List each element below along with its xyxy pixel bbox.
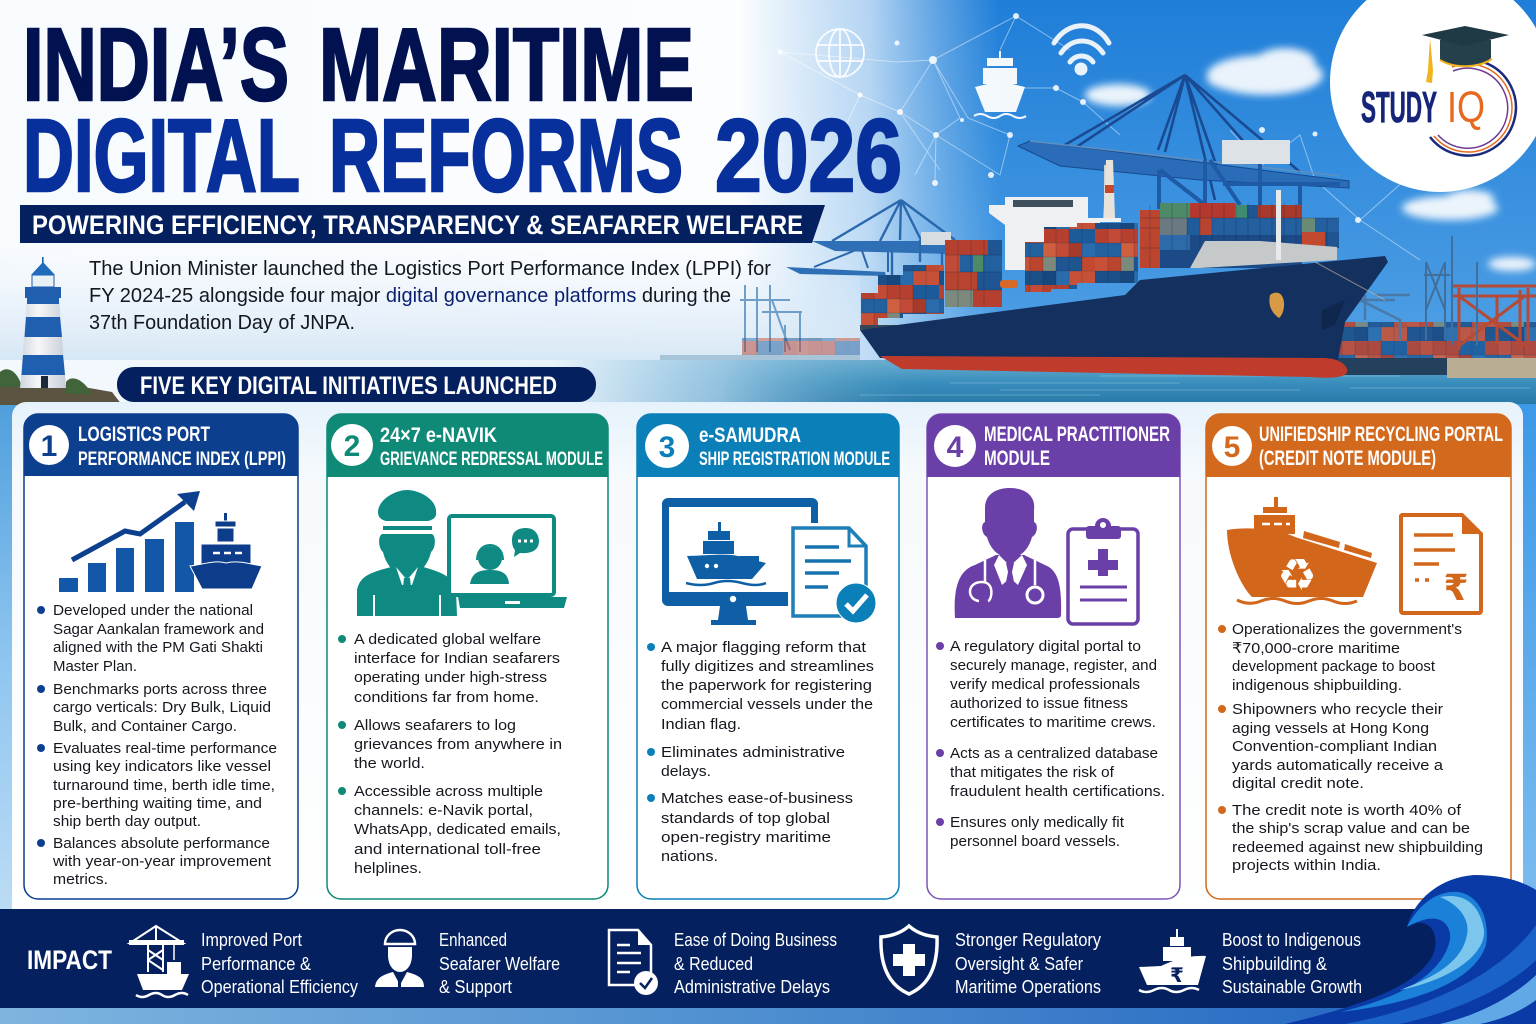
panel: card 1 LPPI: [24, 414, 298, 899]
card 2 text: A dedicated global welfare: [354, 631, 541, 648]
icon: recycling ship and credit note: ♻: [1277, 550, 1317, 601]
card 3 text: [661, 639, 874, 865]
card 1 text: metrics.: [53, 871, 108, 888]
card 3 text: Indian flag.: [661, 716, 741, 733]
card 3 bullets: [647, 643, 655, 802]
card 1 header: LOGISTICS PORT: [78, 423, 210, 446]
card 2 text: [354, 631, 562, 877]
card 3 header: SHIP REGISTRATION MODULE: [699, 449, 890, 470]
card 5 text: Shipowners who recycle their: [1232, 701, 1443, 718]
hatch covers and deck: [1000, 190, 1337, 288]
card 4 bullets: [936, 642, 944, 826]
card 2 bullets: [338, 635, 346, 795]
section pill: five key initiatives: FIVE KEY DIGITAL INITIATIVES LAUNCHED: [140, 372, 557, 400]
card 5 header: 5: [1224, 431, 1240, 464]
panel: card 3 e-Samudra: [637, 414, 899, 899]
card 2 text: grievances from anywhere in: [354, 736, 562, 753]
card 5 text: Operationalizes the government's: [1232, 621, 1462, 638]
subtitle band: POWERING EFFICIENCY, TRANSPARENCY & SEAFARER WELFARE: [32, 210, 803, 240]
hull: [860, 256, 1388, 360]
icon: officer and laptop helpdesk: [357, 490, 567, 616]
card 5 text: the ship's scrap value and can be: [1232, 820, 1470, 837]
card 4 text: [950, 638, 1165, 850]
crane: rear small: [786, 200, 955, 290]
card 2 text: conditions far from home.: [354, 689, 539, 706]
title line 1: [23, 7, 694, 122]
impact 5: shipbuilding: Boost to Indigenous: [1222, 930, 1361, 950]
icon: recycling ship and credit note: ₹: [1443, 568, 1469, 609]
card 5 text: aging vessels at Hong Kong: [1232, 720, 1429, 737]
logo rings: [1430, 60, 1516, 156]
impact bar: [0, 909, 1536, 1008]
panel: card 4 Medical Practitioner: [927, 414, 1180, 899]
card 5 text: digital credit note.: [1232, 775, 1364, 792]
container stacks: [860, 203, 1339, 330]
intro text: FY 2024-25 alongside four major digital governance platforms during the: [89, 285, 731, 307]
card 3 text: standards of top global: [661, 810, 830, 827]
right port and quay: [1325, 236, 1536, 378]
card 5 text: The credit note is worth 40% of: [1232, 802, 1462, 819]
card 1 text: turnaround time, berth idle time,: [53, 777, 275, 794]
card 4 text: verify medical professionals: [950, 676, 1140, 693]
card 3 header: 3: [659, 431, 675, 464]
card 3 text: commercial vessels under the: [661, 696, 873, 713]
impact 2: seafarer welfare: & Support: [439, 977, 512, 997]
card 2 text: helplines.: [354, 860, 422, 877]
impact label: IMPACT: [27, 945, 112, 975]
card 3 text: open-registry maritime: [661, 829, 831, 846]
distant port left: [660, 285, 860, 360]
card 1 text: pre-berthing waiting time, and: [53, 795, 262, 812]
title: [23, 7, 902, 213]
card 1 text: Master Plan.: [53, 658, 137, 675]
card 4 header: 4: [947, 431, 964, 464]
clouds: [1085, 48, 1536, 271]
section pill: five key initiatives: [117, 367, 596, 402]
card 2 header: GRIEVANCE REDRESSAL MODULE: [380, 449, 603, 470]
card 1 header: PERFORMANCE INDEX (LPPI): [78, 449, 286, 470]
logo graduation cap: [1422, 26, 1509, 83]
lighthouse: [0, 257, 122, 405]
wave decoration: [1285, 875, 1536, 1024]
card 1 text: Balances absolute performance: [53, 835, 270, 852]
title line 1: MARITIME: [319, 7, 694, 122]
card 1 text: cargo verticals: Dry Bulk, Liquid: [53, 699, 271, 716]
card 1 text: aligned with the PM Gati Shakti: [53, 639, 263, 656]
card 1 text: Bulk, and Container Cargo.: [53, 718, 237, 735]
icon: recycling ship and credit note: [1227, 497, 1481, 613]
card 2 header: [327, 414, 608, 477]
card 2 text: the world.: [354, 755, 425, 772]
bow details: [1269, 262, 1385, 330]
card 1 text: [52, 602, 277, 888]
card 4 text: personnel board vessels.: [950, 833, 1120, 850]
impact 4: regulatory oversight: [881, 926, 1101, 997]
card 5 text: projects within India.: [1232, 857, 1381, 874]
card 4 header: [927, 414, 1180, 477]
impact 5: shipbuilding: Sustainable Growth: [1222, 977, 1362, 997]
card 1 text: with year-on-year improvement: [52, 853, 272, 870]
title line 2: DIGITAL: [23, 98, 300, 213]
card 1 text: Benchmarks ports across three: [53, 681, 267, 698]
superstructure: [989, 160, 1121, 270]
card 2 header: 24×7 e-NAVIK: [380, 424, 497, 447]
intro text: The Union Minister launched the Logistics Port Performance Index (LPPI) for: [89, 258, 771, 280]
title line 2: 2026: [715, 98, 902, 213]
card 5 header: (CREDIT NOTE MODULE): [1259, 447, 1436, 470]
card 4 text: fraudulent health certifications.: [950, 783, 1165, 800]
card 5 bullets: [1218, 625, 1226, 814]
card 2 text: interface for Indian seafarers: [354, 650, 560, 667]
impact 3: ease of doing business: Ease of Doing Business: [674, 930, 837, 950]
card 1 text: using key indicators like vessel: [53, 758, 271, 775]
card 2 text: and international toll-free: [354, 841, 541, 858]
container ship: [860, 160, 1388, 378]
impact 3: ease of doing business: & Reduced: [674, 954, 753, 974]
card 3 text: the paperwork for registering: [661, 677, 872, 694]
card 1 text: ship berth day output.: [53, 813, 201, 830]
logo: StudyIQ: [1330, 0, 1536, 192]
card 3 text: delays.: [661, 763, 711, 780]
card 1 header: [24, 414, 298, 476]
logo wordmark: IQ: [1447, 83, 1485, 132]
card 4 text: Acts as a centralized database: [950, 745, 1158, 762]
card 2 header: 2: [344, 430, 360, 463]
icon: globe: [816, 29, 864, 77]
card 2 text: channels: e-Navik portal,: [354, 802, 533, 819]
white panel behind cards: [12, 402, 1523, 922]
crane: main gantry: [1018, 75, 1349, 209]
impact 5: shipbuilding: [1139, 929, 1362, 997]
card 2 text: Accessible across multiple: [354, 783, 543, 800]
impact 5: shipbuilding: ₹: [1170, 963, 1184, 987]
logo wordmark: STUDY: [1361, 83, 1437, 132]
impact 4: regulatory oversight: Maritime Operations: [955, 977, 1101, 997]
impact 2: seafarer welfare: Enhanced: [439, 930, 507, 950]
card 1 text: Sagar Aankalan framework and: [53, 621, 264, 638]
intro text: 37th Foundation Day of JNPA.: [89, 312, 355, 334]
impact 1: port performance: [130, 926, 358, 997]
impact 1: port performance: Operational Efficiency: [201, 977, 358, 997]
intro text: [89, 258, 771, 334]
card 3 text: Eliminates administrative: [661, 744, 845, 761]
impact 1: port performance: Improved Port: [201, 930, 302, 950]
card 4 text: authorized to issue fitness: [950, 695, 1128, 712]
card 5 text: [1232, 621, 1483, 874]
card 3 text: A major flagging reform that: [661, 639, 867, 656]
card 4 text: certificates to maritime crews.: [950, 714, 1156, 731]
impact 4: regulatory oversight: Stronger Regulatory: [955, 930, 1101, 950]
card 4 text: securely manage, register, and: [950, 657, 1157, 674]
digital network overlay: [780, 16, 1420, 260]
card 5 text: ₹70,000-crore maritime: [1232, 640, 1400, 657]
title line 1: INDIA’S: [23, 7, 289, 122]
card 2 text: WhatsApp, dedicated emails,: [354, 821, 561, 838]
bottom gradient strip: [0, 1008, 1536, 1024]
card 5 text: indigenous shipbuilding.: [1232, 677, 1402, 694]
card 1 text: Evaluates real-time performance: [53, 740, 277, 757]
impact 1: port performance: Performance &: [201, 954, 311, 974]
card 5 text: yards automatically receive a: [1232, 757, 1444, 774]
card 5 header: [1206, 414, 1511, 477]
title line 2: REFORMS: [329, 98, 683, 213]
impact 3: ease of doing business: [609, 930, 837, 997]
card 4 header: MODULE: [984, 447, 1050, 470]
panel: card 5 Unified Ship Recycling: [1206, 414, 1511, 899]
icon: ship hologram: [974, 51, 1026, 118]
card 4 text: Ensures only medically fit: [950, 814, 1125, 831]
card 5 text: Convention-compliant Indian: [1232, 738, 1437, 755]
card 1 text: Developed under the national: [53, 602, 253, 619]
water: [0, 360, 1536, 404]
card 4 header: MEDICAL PRACTITIONER: [984, 423, 1170, 446]
impact 3: ease of doing business: Administrative Delays: [674, 977, 830, 997]
impact 4: regulatory oversight: Oversight & Safer: [955, 954, 1083, 974]
card 1 bullets: [37, 606, 45, 847]
card 5 text: redeemed against new shipbuilding: [1232, 839, 1483, 856]
impact 2: seafarer welfare: Seafarer Welfare: [439, 954, 560, 974]
boot stripe: [880, 356, 1347, 378]
icon: monitor, ship and document: [662, 498, 876, 625]
icon: wifi: [1054, 26, 1109, 73]
card 2 text: Allows seafarers to log: [354, 717, 516, 734]
card 4 text: A regulatory digital portal to: [950, 638, 1141, 655]
icon: doctor and clipboard: [955, 488, 1138, 624]
crane: rear large: [812, 241, 955, 254]
card 2 text: operating under high-stress: [354, 669, 547, 686]
impact 2: seafarer welfare: [375, 930, 560, 997]
panel: card 2 e-Navik: [327, 414, 608, 899]
card 4 text: that mitigates the risk of: [950, 764, 1115, 781]
network nodes: [778, 13, 1361, 223]
card 3 text: nations.: [661, 848, 718, 865]
card 1 header: 1: [41, 430, 57, 463]
impact 5: shipbuilding: Shipbuilding &: [1222, 954, 1327, 974]
card 3 header: [637, 414, 899, 477]
card 3 text: fully digitizes and streamlines: [661, 658, 874, 675]
icon: growth chart and ship: [59, 491, 262, 592]
card 3 text: Matches ease-of-business: [661, 790, 853, 807]
title line 2: [23, 98, 902, 213]
card 5 text: development package to boost: [1232, 658, 1436, 675]
card 3 header: e-SAMUDRA: [699, 424, 801, 447]
